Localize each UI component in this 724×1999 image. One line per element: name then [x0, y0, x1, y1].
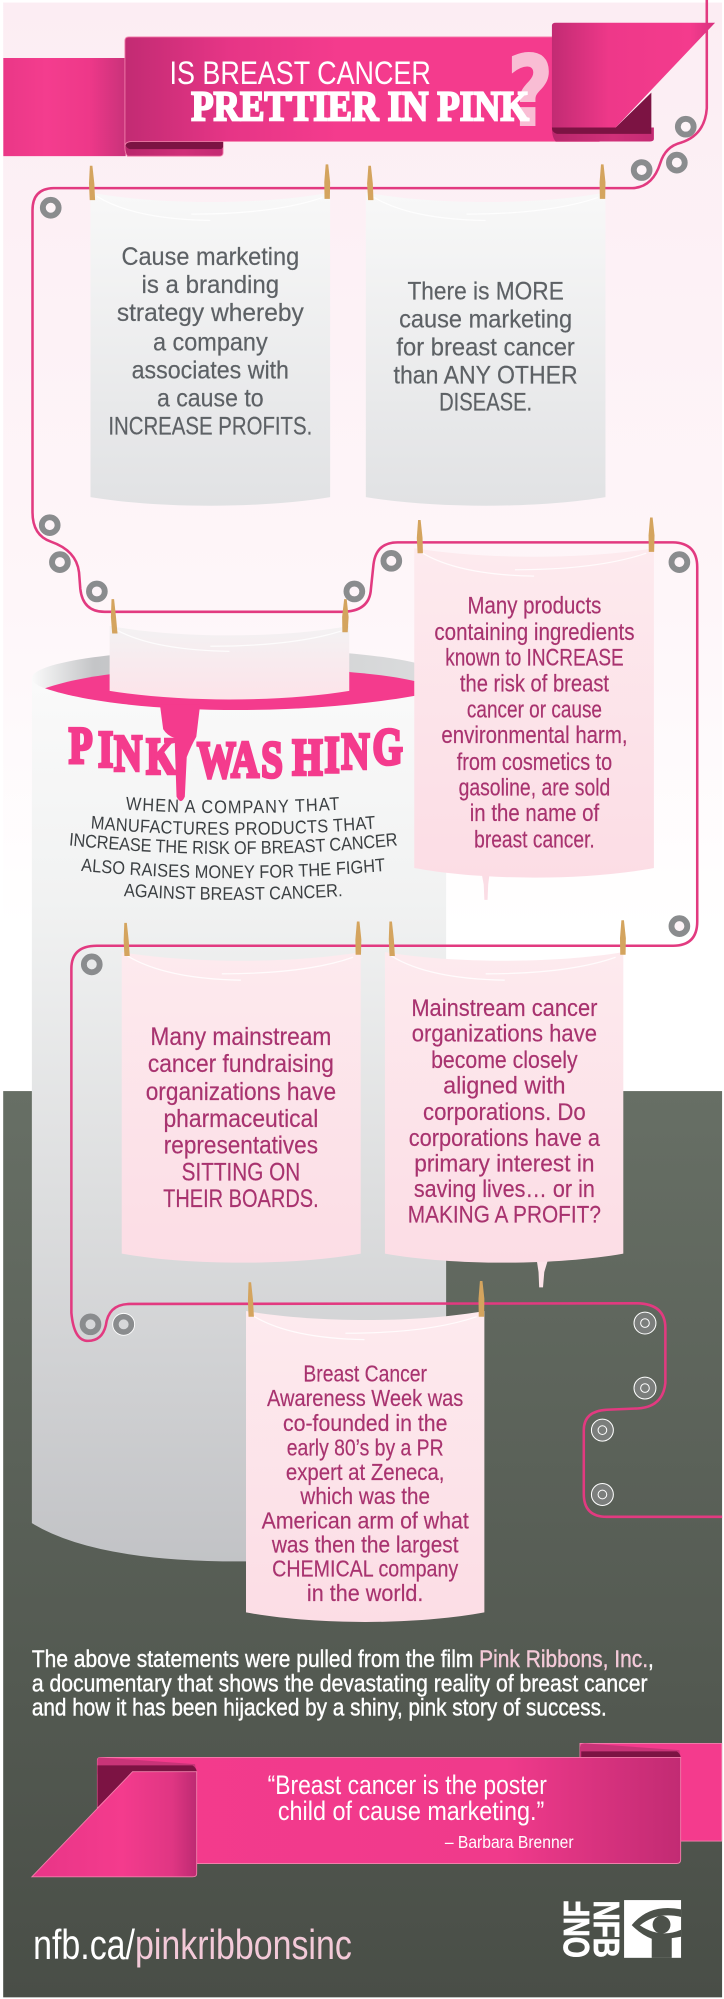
- heading: Pinkwashing: WASHING: [197, 718, 403, 788]
- clothesline: [33, 0, 722, 1517]
- cloth text: organizations have: [412, 1020, 597, 1047]
- clothespins: [89, 164, 655, 1317]
- title line two: PRETTIER IN PINK: [191, 84, 529, 130]
- pinkwashing definition: MANUFACTURES PRODUCTS THAT: [92, 816, 374, 835]
- cloth text: than ANY OTHER: [394, 363, 578, 390]
- pink paint surface: [45, 668, 440, 710]
- cloth text: was then the largest: [271, 1531, 459, 1557]
- pinkwashing definition: ALSO RAISES MONEY FOR THE FIGHT: [81, 858, 384, 878]
- left flap shadow: [97, 1765, 197, 1807]
- cloth text: environmental harm,: [441, 722, 628, 748]
- cloth text: from cosmetics to: [457, 749, 612, 775]
- cloth text: co-founded in the: [283, 1410, 447, 1436]
- cloth text: is a branding: [141, 272, 279, 299]
- banner main ribbon: [125, 37, 599, 147]
- cloth text: strategy whereby: [117, 300, 304, 327]
- title line one: IS BREAST CANCER: [170, 55, 431, 91]
- right fold underside: [552, 127, 654, 141]
- drip from cloth: [482, 874, 489, 900]
- right fold shadow: [552, 93, 651, 134]
- quote line one: “Breast cancer is the poster: [268, 1770, 547, 1800]
- cloth text: aligned with: [443, 1073, 566, 1100]
- cloth text: MAKING A PROFIT?: [408, 1201, 601, 1228]
- cloth text: gasoline, are sold: [459, 774, 610, 800]
- cloth text: in the name of: [470, 800, 600, 826]
- cloth text: known to INCREASE: [445, 644, 624, 670]
- pinkwashing definition: [70, 796, 397, 900]
- film source statement: The above statements were pulled from the film Pink Ribbons, Inc.,: [32, 1646, 654, 1672]
- cloth text: [434, 593, 635, 853]
- cloth text: corporations have a: [409, 1125, 600, 1152]
- grommets along clothesline: [42, 119, 694, 1505]
- NFB ONF logo: [557, 1900, 681, 1958]
- cloth text: Breast Cancer: [303, 1361, 427, 1387]
- pinkwashing definition: WHEN A COMPANY THAT: [126, 796, 339, 814]
- cloth text: containing ingredients: [434, 619, 635, 645]
- cloth text: cancer fundraising: [148, 1051, 334, 1078]
- question mark: ?: [507, 35, 553, 148]
- cloth text: primary interest in: [414, 1150, 595, 1177]
- cloth text: expert at Zeneca,: [286, 1459, 444, 1485]
- cloth text: associates with: [132, 358, 289, 385]
- film source statement: and how it has been hijacked by a shiny, pink story of success.: [32, 1695, 607, 1721]
- banner right flap: [552, 23, 715, 127]
- paint drip: [160, 705, 200, 801]
- quote line two: child of cause marketing.”: [278, 1796, 544, 1826]
- cloth text: [394, 279, 578, 416]
- cloth: dipped into paint bucket: [110, 626, 349, 699]
- cloth text: Many products: [468, 593, 601, 619]
- cloth text: Cause marketing: [121, 244, 299, 271]
- cloth text: a company: [153, 330, 268, 357]
- cloth text: a cause to: [157, 386, 264, 413]
- logo wordmark ONF: ONF: [557, 1900, 597, 1958]
- cloth: products that increase risk: [414, 548, 654, 900]
- quote attribution: – Barbara Brenner: [445, 1832, 574, 1852]
- cloth text: [108, 244, 312, 441]
- heading: Pinkwashing: [69, 716, 403, 788]
- cloth: cause marketing definition: [90, 192, 330, 506]
- quote ribbon: [32, 1743, 722, 1877]
- cloth: pharmaceutical representatives: [122, 952, 361, 1263]
- right tail fold shadow: [581, 1751, 681, 1758]
- drip from cloth: [537, 1259, 548, 1287]
- cloth text: THEIR BOARDS.: [163, 1186, 319, 1213]
- film source statement: a documentary that shows the devastating reality of breast cancer: [32, 1670, 648, 1696]
- ribbon main band: [97, 1757, 681, 1864]
- tail fold: [125, 140, 223, 156]
- cloth text: There is MORE: [407, 279, 564, 306]
- logo wordmark NFB: NFB: [586, 1900, 626, 1958]
- cloth: corporations and profit: [385, 952, 623, 1287]
- right tail rim: [580, 1743, 681, 1758]
- paint bucket with pink paint: [32, 649, 446, 1561]
- background: dark grey-green lower section: [3, 1091, 722, 1997]
- cloth text: the risk of breast: [460, 670, 609, 696]
- ribbon right tail: [580, 1743, 722, 1841]
- cloth text: saving lives… or in: [414, 1176, 595, 1203]
- cloth text: INCREASE PROFITS.: [108, 414, 312, 441]
- bucket rim: [32, 649, 446, 707]
- cloth text: breast cancer.: [474, 827, 595, 853]
- cloth text: American arm of what: [262, 1507, 469, 1533]
- cloth text: for breast cancer: [396, 335, 575, 362]
- left fold rim: [97, 1757, 197, 1774]
- cloth text: organizations have: [146, 1079, 336, 1106]
- cloth text: [262, 1361, 469, 1606]
- cloth text: Many mainstream: [150, 1024, 331, 1051]
- cloth text: [408, 995, 601, 1228]
- cloth text: Mainstream cancer: [411, 995, 597, 1022]
- cloth text: representatives: [164, 1133, 318, 1160]
- cloth text: SITTING ON: [182, 1159, 300, 1186]
- cloth text: become closely: [431, 1047, 578, 1074]
- pinkwashing definition: AGAINST BREAST CANCER.: [124, 884, 342, 900]
- pinkwashing definition: INCREASE THE RISK OF BREAST CANCER: [70, 833, 397, 854]
- cloth text: cause marketing: [399, 307, 572, 334]
- bucket body: [32, 678, 446, 1561]
- cloth text: corporations. Do: [423, 1099, 586, 1126]
- cloth text: cancer or cause: [467, 697, 602, 723]
- cloth text: which was the: [300, 1483, 430, 1509]
- title banner: [3, 23, 715, 156]
- logo eye mark: [624, 1900, 681, 1958]
- background: pale pink to white upper section: [3, 3, 722, 1091]
- cloth text: [146, 1024, 336, 1213]
- website url: nfb.ca/pinkribbonsinc: [33, 1921, 352, 1968]
- cloth text: Awareness Week was: [267, 1385, 463, 1411]
- cloth text: DISEASE.: [439, 389, 532, 416]
- banner left tail: [3, 58, 126, 156]
- film source statement: [32, 1646, 654, 1721]
- heading: Pinkwashing: PINK: [69, 716, 176, 785]
- cloth: Breast Cancer Awareness Week: [246, 1311, 484, 1622]
- left flap: [32, 1772, 197, 1877]
- tail fold shadow: [125, 141, 223, 149]
- cloth text: CHEMICAL company: [272, 1556, 459, 1582]
- cloth text: early 80’s by a PR: [287, 1435, 444, 1461]
- cloth: more cause marketing for breast cancer: [366, 192, 605, 506]
- cloth text: pharmaceutical: [163, 1106, 318, 1133]
- cloth text: in the world.: [307, 1580, 423, 1606]
